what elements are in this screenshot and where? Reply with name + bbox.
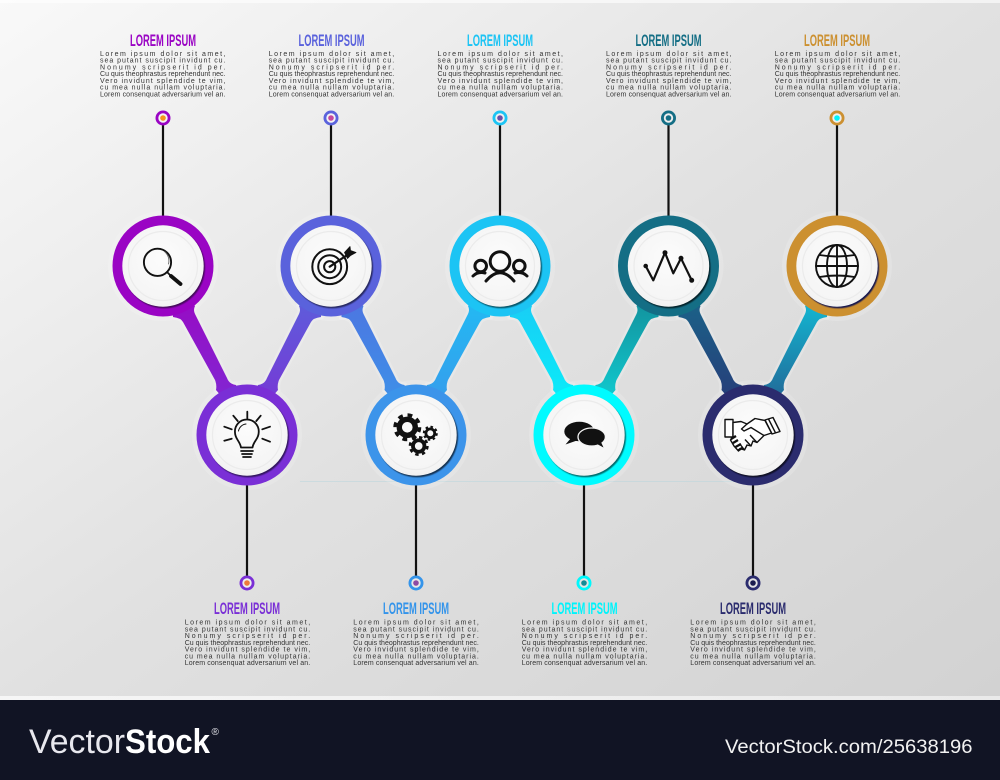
text block 2 <box>269 32 394 98</box>
heading 4: LOREM IPSUM <box>636 32 702 50</box>
heading 8: LOREM IPSUM <box>552 600 618 618</box>
icon: magnifying glass <box>144 249 180 284</box>
body 3: Nonumy scripserit id per. <box>438 64 563 72</box>
text block 1 <box>100 32 226 98</box>
body 5: Lorem ipsum dolor sit amet, <box>775 51 900 58</box>
body 6: Nonumy scripserit id per. <box>185 633 310 640</box>
body 5: cu mea nulla nullam voluptaria. <box>775 85 900 92</box>
body 3: cu mea nulla nullam voluptaria. <box>438 85 563 92</box>
heading 9: LOREM IPSUM <box>720 600 786 618</box>
footer logo: Stock <box>125 723 210 761</box>
body 8: Lorem ipsum dolor sit amet, <box>522 620 647 627</box>
connector 5 <box>510 286 584 426</box>
body 6: cu mea nulla nullam voluptaria. <box>185 653 310 660</box>
icon: handshake <box>725 418 780 451</box>
body 5: Vero invidunt splendide te vim, <box>775 78 900 85</box>
stem and pin 6 <box>240 484 254 590</box>
stem and pin 5 <box>830 110 844 217</box>
text block 4 <box>606 32 732 98</box>
body 8: Vero invidunt splendide te vim, <box>522 647 647 654</box>
body 5 <box>775 51 900 98</box>
body 4: Nonumy scripserit id per. <box>606 64 732 72</box>
node 6: idea <box>196 384 298 486</box>
body 2: Cu quis theophrastus reprehendunt nec. <box>269 71 394 78</box>
connector chain <box>173 286 827 426</box>
node 9: handshake <box>702 384 804 486</box>
body 8: Cu quis theophrastus reprehendunt nec. <box>522 640 647 647</box>
body 1: cu mea nulla nullam voluptaria. <box>100 85 226 92</box>
text block 3 <box>438 32 563 98</box>
heading 2: LOREM IPSUM <box>298 32 364 50</box>
heading 7: LOREM IPSUM <box>383 600 449 618</box>
stem and pin 2 <box>324 110 338 217</box>
body 2 <box>269 51 394 98</box>
body 9: Lorem consenquat adversarium vel an. <box>690 660 816 667</box>
body 2: Lorem ipsum dolor sit amet, <box>269 51 394 58</box>
body 7: Lorem ipsum dolor sit amet, <box>353 620 479 627</box>
heading 5: LOREM IPSUM <box>804 32 870 50</box>
body 1: Cu quis theophrastus reprehendunt nec. <box>100 71 226 78</box>
body 7: Nonumy scripserit id per. <box>353 633 479 640</box>
body 7: cu mea nulla nullam voluptaria. <box>353 653 479 660</box>
icon: target with arrow <box>312 246 356 284</box>
body 7: sea putant suscipit invidunt cu. <box>353 626 479 633</box>
connector 4 <box>416 286 490 426</box>
icon: three gears <box>395 415 437 455</box>
body 6: sea putant suscipit invidunt cu. <box>185 626 310 633</box>
body 9: cu mea nulla nullam voluptaria. <box>690 653 816 660</box>
body 9 <box>690 620 816 667</box>
body 8: sea putant suscipit invidunt cu. <box>522 626 647 633</box>
body 1: Nonumy scripserit id per. <box>100 64 226 72</box>
body 3: sea putant suscipit invidunt cu. <box>438 58 563 65</box>
body 6: Cu quis theophrastus reprehendunt nec. <box>185 640 310 647</box>
body 1: Lorem ipsum dolor sit amet, <box>100 51 226 58</box>
body 1: sea putant suscipit invidunt cu. <box>100 58 226 65</box>
icon: light bulb <box>224 412 270 457</box>
body 5: Nonumy scripserit id per. <box>775 64 900 72</box>
node 1: search <box>112 216 214 316</box>
body 9: Lorem ipsum dolor sit amet, <box>690 620 816 627</box>
footer logo: Vector <box>29 723 125 761</box>
body 4 <box>606 51 732 98</box>
body 6: Lorem consenquat adversarium vel an. <box>185 660 310 667</box>
body 3 <box>438 51 563 98</box>
node 7: settings <box>366 384 466 486</box>
text block 6 <box>185 600 310 667</box>
body 9: Cu quis theophrastus reprehendunt nec. <box>690 640 816 647</box>
body 4: Lorem consenquat adversarium vel an. <box>606 92 732 98</box>
body 2: sea putant suscipit invidunt cu. <box>269 58 394 65</box>
text block 9 <box>690 600 816 667</box>
node 2: target <box>280 216 382 316</box>
icon: group of people <box>473 252 527 281</box>
body 8: Nonumy scripserit id per. <box>522 633 647 640</box>
heading 6: LOREM IPSUM <box>214 600 280 618</box>
body 5: sea putant suscipit invidunt cu. <box>775 58 900 65</box>
stem and pin 8 <box>576 484 592 590</box>
body 4: sea putant suscipit invidunt cu. <box>606 58 732 65</box>
body 3: Cu quis theophrastus reprehendunt nec. <box>438 71 563 78</box>
body 6: Lorem ipsum dolor sit amet, <box>185 620 310 627</box>
text block 5 <box>775 32 900 98</box>
node 4: line chart <box>618 216 719 316</box>
node 5: globe <box>786 216 888 316</box>
faint horizontal reflection line <box>300 480 735 482</box>
body 2: Nonumy scripserit id per. <box>269 64 394 72</box>
body 7: Vero invidunt splendide te vim, <box>353 647 479 654</box>
connector 3 <box>342 286 416 426</box>
body 3: Lorem ipsum dolor sit amet, <box>438 51 563 58</box>
connector 2 <box>247 286 321 426</box>
connector 7 <box>678 286 752 426</box>
heading 1: LOREM IPSUM <box>130 32 196 50</box>
body 1 <box>100 51 226 98</box>
text block 7 <box>353 600 479 667</box>
text block 8 <box>522 600 647 667</box>
body 8: Lorem consenquat adversarium vel an. <box>522 660 647 667</box>
body 4: Cu quis theophrastus reprehendunt nec. <box>606 71 732 78</box>
footer id: VectorStock.com/25638196 <box>725 737 972 758</box>
body 5: Cu quis theophrastus reprehendunt nec. <box>775 71 900 78</box>
body 9: sea putant suscipit invidunt cu. <box>690 626 816 633</box>
body 3: Vero invidunt splendide te vim, <box>438 78 563 85</box>
body 7 <box>353 620 479 667</box>
body 9: Vero invidunt splendide te vim, <box>690 647 816 654</box>
stem and pin 9 <box>746 484 760 590</box>
stem and pin 4 <box>661 110 676 217</box>
body 6: Vero invidunt splendide te vim, <box>185 647 310 654</box>
registered mark: ® <box>212 727 220 738</box>
body 1: Lorem consenquat adversarium vel an. <box>100 92 226 98</box>
node 8: chat <box>534 384 634 486</box>
body 3: Lorem consenquat adversarium vel an. <box>438 92 563 98</box>
body 2: Vero invidunt splendide te vim, <box>269 78 394 85</box>
body 4: Lorem ipsum dolor sit amet, <box>606 51 732 58</box>
footer bar <box>0 700 1000 780</box>
body 7: Lorem consenquat adversarium vel an. <box>353 660 479 667</box>
body 4: Vero invidunt splendide te vim, <box>606 78 732 85</box>
body 4: cu mea nulla nullam voluptaria. <box>606 85 732 92</box>
connector 8 <box>753 286 827 426</box>
icon: speech bubbles <box>564 422 605 448</box>
body 5: Lorem consenquat adversarium vel an. <box>775 92 900 98</box>
body 1: Vero invidunt splendide te vim, <box>100 78 226 85</box>
body 8 <box>522 620 647 667</box>
node 3: team <box>450 216 550 316</box>
stem and pin 7 <box>408 484 424 590</box>
body 2: Lorem consenquat adversarium vel an. <box>269 92 394 98</box>
body 7: Cu quis theophrastus reprehendunt nec. <box>353 640 479 647</box>
soft halos behind nodes <box>108 211 892 490</box>
connector 1 <box>173 286 247 426</box>
icon: globe <box>816 245 858 287</box>
body 9: Nonumy scripserit id per. <box>690 633 816 640</box>
body 8: cu mea nulla nullam voluptaria. <box>522 653 647 660</box>
connector 6 <box>584 286 658 426</box>
heading 3: LOREM IPSUM <box>467 32 533 50</box>
stem and pin 1 <box>156 110 170 217</box>
body 2: cu mea nulla nullam voluptaria. <box>269 85 394 92</box>
icon: zigzag line chart <box>644 251 694 282</box>
stem and pin 3 <box>492 110 508 217</box>
body 6 <box>185 620 310 667</box>
